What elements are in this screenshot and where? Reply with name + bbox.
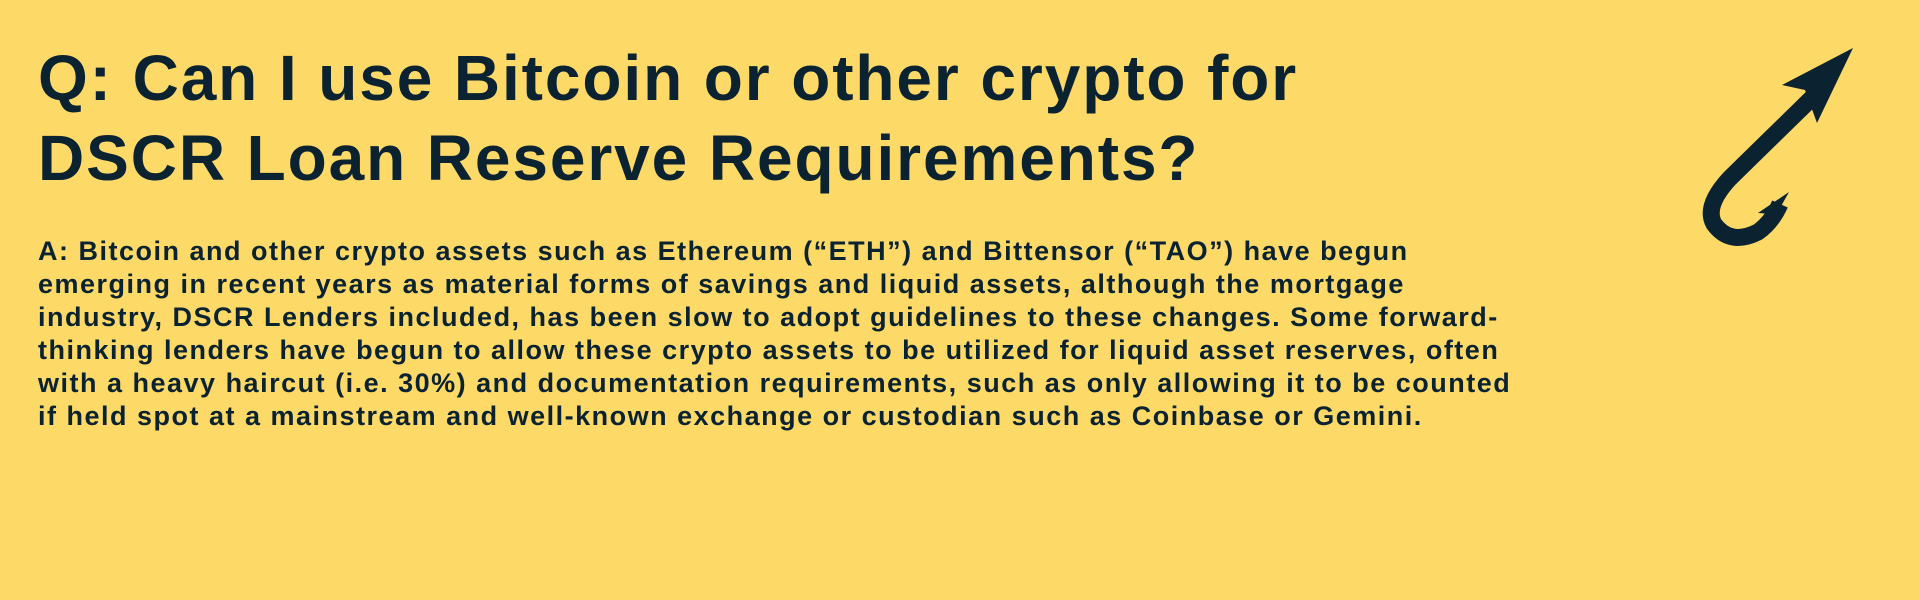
answer text: industry, DSCR Lenders included, has been slow to adopt guidelines to these changes. Some forward- bbox=[38, 302, 1499, 332]
answer text: if held spot at a mainstream and well-known exchange or custodian such as Coinbase or Gemini. bbox=[38, 401, 1423, 431]
answer text: thinking lenders have begun to allow these crypto assets to be utilized for liquid asset reserves, often bbox=[38, 335, 1499, 365]
answer text: A: Bitcoin and other crypto assets such as Ethereum (“ETH”) and Bittensor (“TAO”) have begun bbox=[38, 236, 1409, 266]
answer text: with a heavy haircut (i.e. 30%) and documentation requirements, such as only allowing it to be counted bbox=[38, 368, 1511, 398]
title: Q: Can I use Bitcoin or other crypto for bbox=[38, 42, 1298, 114]
title bbox=[38, 42, 1298, 194]
title: DSCR Loan Reserve Requirements? bbox=[38, 122, 1199, 194]
answer text: emerging in recent years as material forms of savings and liquid assets, although the mortgage bbox=[38, 269, 1405, 299]
answer text bbox=[38, 236, 1511, 431]
